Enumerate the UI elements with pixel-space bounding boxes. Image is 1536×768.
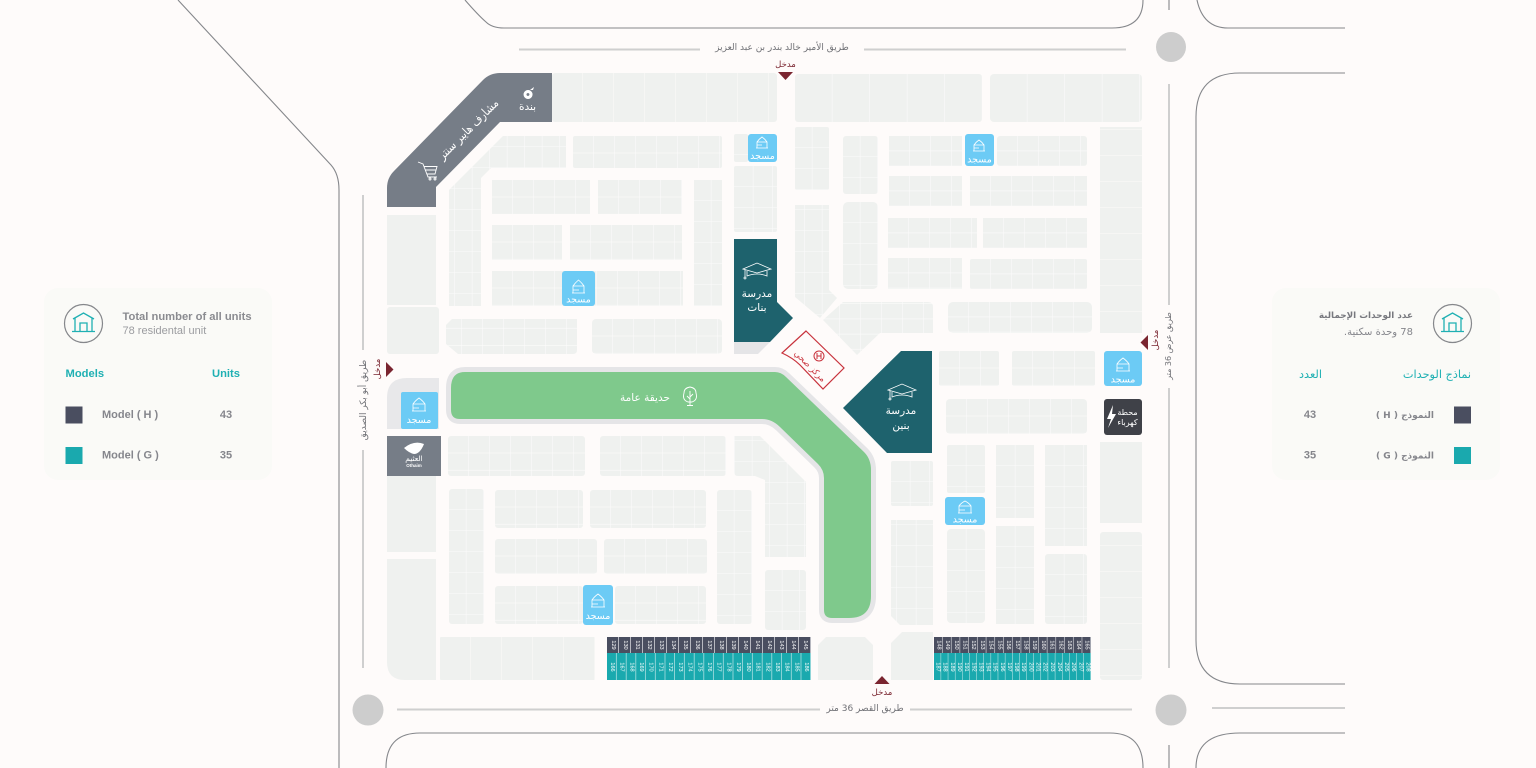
mosque 6 (945, 497, 985, 526)
girls school: بنات (747, 302, 767, 314)
unit strip: south-west, model H: 139 (730, 640, 736, 650)
unit strip: south-east, model G: 188 (942, 662, 948, 672)
unit strip: south-west, model G: 178 (725, 662, 731, 672)
unit strip: south-east, model H: 165 (1084, 640, 1090, 650)
health centre label: مركز صحي (792, 349, 827, 384)
mosque 3 (562, 271, 595, 306)
label: محطة (1117, 408, 1138, 417)
mosque 1: مسجد (750, 151, 775, 162)
icon: tree (684, 387, 696, 406)
unit strip: south-west, model G: 176 (706, 662, 712, 672)
label: مدرسة (886, 405, 916, 417)
road centre lines (363, 50, 1345, 710)
entrance west (373, 359, 394, 379)
unit strip: south-east, model G: 187 (935, 662, 941, 672)
public park (451, 372, 871, 618)
power station (1104, 399, 1142, 435)
unit strip: south-east, model G: 191 (963, 662, 969, 672)
legend row H: Model ( H ) (102, 409, 159, 421)
power station: كهرباء (1117, 418, 1138, 427)
Othaim label: العثيم (405, 454, 423, 463)
legend row G: النموذج ( G ) (1376, 452, 1434, 462)
unit strip: south-east, model G: 205 (1063, 662, 1069, 672)
entrance north: مدخل (775, 60, 796, 70)
shopping centre name: مشارف هايبر سنتر (434, 96, 502, 164)
subheading: 78 وحدة سكنية. (1344, 327, 1413, 338)
mosque 3: مسجد (566, 294, 591, 306)
unit strip: south-west, model G: 167 (619, 662, 625, 672)
road label: north: طريق الأمير خالد بندر بن عبد العزيز (714, 41, 849, 53)
unit strip: south-east, model H: 163 (1066, 640, 1072, 650)
unit strip: south-west, model G: 184 (784, 662, 790, 672)
unit strip: south-west, model H (607, 637, 811, 653)
unit strip: south-east, model G: 198 (1013, 662, 1019, 672)
entrance south (872, 676, 892, 698)
service strip below girls school (734, 342, 770, 354)
unit strip: south-east, model G: 203 (1049, 662, 1055, 672)
legend row H: 43 (1304, 409, 1316, 421)
unit strip: south-east, model G: 194 (984, 662, 990, 672)
unit strip: south-east, model G: 189 (949, 662, 955, 672)
icon: house (64, 304, 102, 342)
unit strip: south-west, model H: 129 (610, 640, 616, 650)
unit strip: south-west, model H: 134 (670, 640, 676, 650)
unit strip: south-west, model G: 181 (755, 662, 761, 672)
Othaim market (387, 436, 441, 476)
unit strip: south-west, model G: 186 (803, 662, 809, 672)
legend row H: 43 (220, 409, 232, 421)
legend row G: 35 (1304, 450, 1316, 462)
panel: English legend (44, 288, 272, 480)
unit strip: south-west, model G: 166 (609, 662, 615, 672)
unit strip: south-east, model H: 157 (1014, 640, 1020, 650)
unit strip: south-east, model H: 160 (1040, 640, 1046, 650)
unit strip: south-east, model G: 207 (1077, 662, 1083, 672)
entrance north (775, 60, 796, 80)
unit strip: south-west, model G: 180 (745, 662, 751, 672)
unit strip: south-east, model G: 197 (1006, 662, 1012, 672)
icon: graduation cap (743, 263, 771, 279)
unit strip: south-east, model G: 199 (1020, 662, 1026, 672)
legend row H: النموذج ( H ) (1376, 411, 1434, 421)
label: Panda: بندة (519, 101, 536, 113)
legend row G: Model ( G ) (102, 450, 159, 462)
unit strip: south-west, model G: 175 (696, 662, 702, 672)
unit strip: south-east, model H: 155 (996, 640, 1002, 650)
unit strip: south-east, model G: 202 (1042, 662, 1048, 672)
legend row G (66, 447, 232, 464)
unit strip: south-east, model H: 149 (944, 640, 950, 650)
unit strip: south-east, model H: 154 (988, 640, 994, 650)
icon: Panda logo (524, 87, 534, 99)
unit strip: south-east, model G: 206 (1070, 662, 1076, 672)
health centre (782, 331, 844, 389)
mosque 5 (401, 392, 438, 429)
unit strip: south-west, model H: 136 (694, 640, 700, 650)
unit strip: south-east, model G: 208 (1084, 662, 1090, 672)
mosque 6: مسجد (953, 514, 977, 526)
mosque 2: مسجد (967, 154, 992, 166)
entrance east: مدخل (1151, 330, 1161, 350)
unit strip: south-west, model H: 143 (778, 640, 784, 650)
unit strip: south-west, model H: 137 (706, 640, 712, 650)
unit strip: south-west, model H: 145 (802, 640, 808, 650)
unit strip: south-west, model H: 130 (622, 640, 628, 650)
unit strip: south-east, model H: 151 (962, 640, 968, 650)
unit strip: south-west, model G: 171 (657, 662, 663, 672)
residential plots: north-west (387, 73, 777, 354)
column header: units: Units (212, 368, 240, 380)
unit strip: south-west, model G: 183 (774, 662, 780, 672)
unit strip: south-west, model H: 142 (766, 640, 772, 650)
unit strip: south-west, model H: 135 (682, 640, 688, 650)
entrance west: مدخل (373, 359, 383, 379)
unit strip: south-east, model G: 196 (999, 662, 1005, 672)
legend row H (66, 406, 232, 424)
unit strip: south-west, model H: 132 (646, 640, 652, 650)
unit strip: south-west, model G: 179 (735, 662, 741, 672)
unit strip: south-west, model G: 177 (716, 662, 722, 672)
Othaim latin label: Othaim (406, 463, 422, 468)
unit strip: south-east, model G: 200 (1027, 662, 1033, 672)
unit strip: south-east, model H (934, 637, 1091, 653)
unit strip: south-east, model G: 195 (992, 662, 998, 672)
grey plot behind west mosque (387, 378, 439, 429)
residential plots: south-west (387, 436, 806, 680)
unit strip: south-east, model H: 158 (1022, 640, 1028, 650)
unit strip: south-west, model G: 173 (677, 662, 683, 672)
road junction circles (352, 32, 1186, 726)
surrounding street outlines (178, 0, 1345, 768)
entrance east (1140, 330, 1161, 350)
park label: حديقة عامة (620, 392, 670, 404)
mosque 2 (965, 134, 994, 166)
unit strip: south-east, model H: 159 (1031, 640, 1037, 650)
unit strip: south-east, model H: 153 (979, 640, 985, 650)
icon: shopping cart (418, 162, 437, 180)
unit strip: south-west, model G: 170 (648, 662, 654, 672)
unit strip: south-east, model G: 204 (1056, 662, 1062, 672)
icon: graduation cap (888, 384, 916, 400)
unit strip: south-west, model G: 182 (764, 662, 770, 672)
residential plots: north-east (795, 74, 1142, 355)
unit strip: south-west, model G: 185 (793, 662, 799, 672)
road label: west: طريق أبو بكر الصديق (357, 360, 369, 440)
unit strip: south-east, model H: 162 (1057, 640, 1063, 650)
mosque 4 (1104, 351, 1142, 386)
unit strip: south-east, model H: 156 (1005, 640, 1011, 650)
residential plots: south-east (818, 351, 1142, 680)
unit strip: south-east, model H: 161 (1049, 640, 1055, 650)
unit strip: south-west, model H: 144 (790, 640, 796, 650)
unit strip: south-west, model H: 138 (718, 640, 724, 650)
unit strip: south-east, model G (934, 653, 1091, 680)
unit strip: south-west, model H: 131 (634, 640, 640, 650)
unit strip: south-west, model G (607, 653, 811, 680)
unit strip: south-east, model G: 190 (956, 662, 962, 672)
entrance south: مدخل (872, 688, 892, 698)
heading: Total number of all units (122, 311, 252, 323)
legend row G (1304, 447, 1471, 464)
unit strip: south-east, model G: 192 (970, 662, 976, 672)
unit strip: south-east, model G: 193 (977, 662, 983, 672)
unit strip: south-west, model H: 133 (658, 640, 664, 650)
mosque 7 (583, 585, 613, 625)
column header: models: نماذج الوحدات (1403, 368, 1471, 382)
mosque 7: مسجد (586, 611, 610, 622)
unit strip: south-west, model H: 141 (754, 640, 760, 650)
unit strip: south-east, model H: 148 (935, 640, 941, 650)
icon: health (814, 351, 824, 361)
unit strip: south-east, model H: 152 (970, 640, 976, 650)
column header: models: Models (66, 368, 104, 380)
icon: house (1434, 304, 1472, 342)
unit strip: south-west, model G: 168 (628, 662, 634, 672)
mosque 5: مسجد (407, 415, 431, 426)
unit strip: south-west, model G: 172 (667, 662, 673, 672)
icon: Othaim leaf (404, 443, 424, 454)
unit strip: south-west, model G: 169 (638, 662, 644, 672)
column header: count: العدد (1299, 368, 1322, 381)
boys school (843, 351, 932, 453)
unit strip: south-west, model H: 140 (742, 640, 748, 650)
shopping centre block (387, 73, 552, 207)
unit strip: south-east, model G: 201 (1034, 662, 1040, 672)
label: مدرسة (742, 288, 772, 300)
road label: east: طريق عرض 36 متر (1164, 312, 1173, 381)
subheading: 78 residental unit (122, 325, 206, 337)
panel: Arabic legend (1272, 288, 1500, 480)
unit strip: south-east, model H: 150 (953, 640, 959, 650)
road label: south: طريق القصر 36 متر (825, 704, 904, 714)
legend row H (1304, 406, 1471, 424)
icon: lightning (1107, 405, 1116, 428)
unit strip: south-east, model H: 164 (1075, 640, 1081, 650)
mosque 1 (748, 134, 777, 162)
legend row G: 35 (220, 450, 232, 462)
girls school (734, 239, 793, 342)
mosque 4: مسجد (1111, 374, 1135, 386)
heading: عدد الوحدات الإجمالية (1319, 311, 1413, 321)
boys school: بنين (892, 420, 910, 432)
unit strip: south-west, model G: 174 (687, 662, 693, 672)
